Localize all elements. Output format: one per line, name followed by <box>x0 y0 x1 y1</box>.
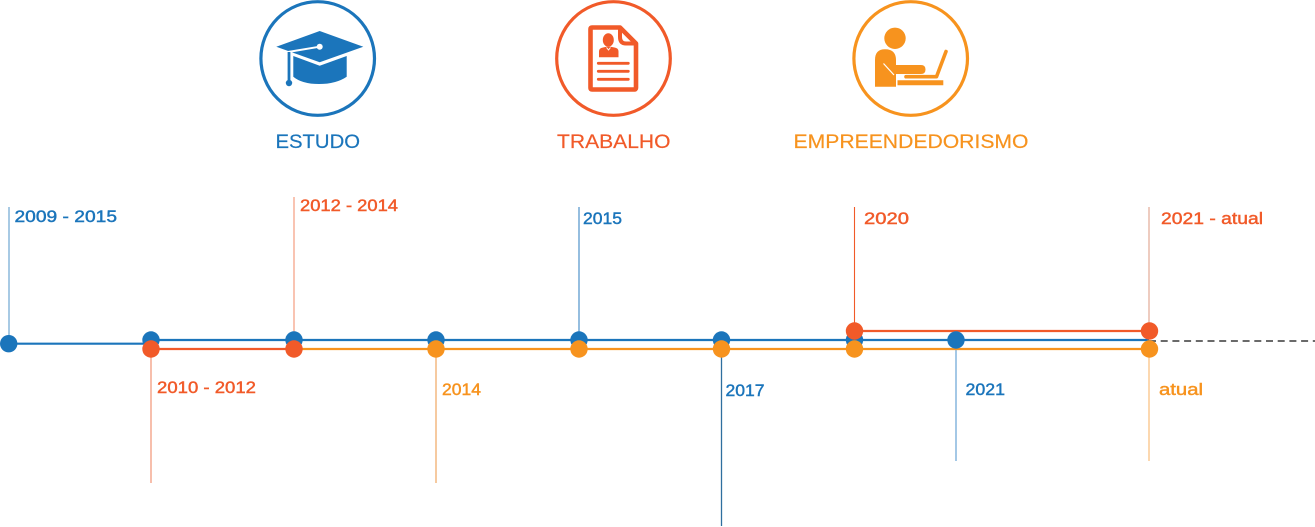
timeline line: trabalho upper <box>854 330 1149 332</box>
timeline dots: trabalho <box>142 322 1158 358</box>
icon: person at laptop in circle <box>854 2 968 115</box>
label: 2009 - 2015: 2009 - 2015 <box>14 207 117 226</box>
label: 2021: 2021 <box>966 380 1005 399</box>
label: 2021 - atual: 2021 - atual <box>1161 209 1263 228</box>
timeline line: trabalho lower <box>151 348 294 350</box>
heading: TRABALHO: TRABALHO <box>557 131 670 153</box>
label: 2020: 2020 <box>864 209 909 228</box>
heading: ESTUDO: ESTUDO <box>276 131 360 153</box>
icon: graduation cap in circle <box>261 2 375 115</box>
label: 2012 - 2014: 2012 - 2014 <box>300 196 398 215</box>
icon: resume document in circle <box>557 2 670 115</box>
timeline dots: estudo <box>0 331 965 352</box>
label: 2015: 2015 <box>583 209 622 228</box>
heading: EMPREENDEDORISMO: EMPREENDEDORISMO <box>794 131 1028 153</box>
timeline line: estudo <box>9 340 1149 344</box>
label: atual: atual <box>1159 380 1203 399</box>
timeline connector lines <box>9 197 1149 526</box>
dashed future line <box>1149 340 1315 342</box>
label: 2014: 2014 <box>442 380 481 399</box>
timeline dots: empreendedorismo <box>427 340 1158 358</box>
timeline line: empreendedorismo <box>294 348 1149 350</box>
label: 2010 - 2012: 2010 - 2012 <box>157 378 256 397</box>
label: 2017: 2017 <box>726 381 764 400</box>
